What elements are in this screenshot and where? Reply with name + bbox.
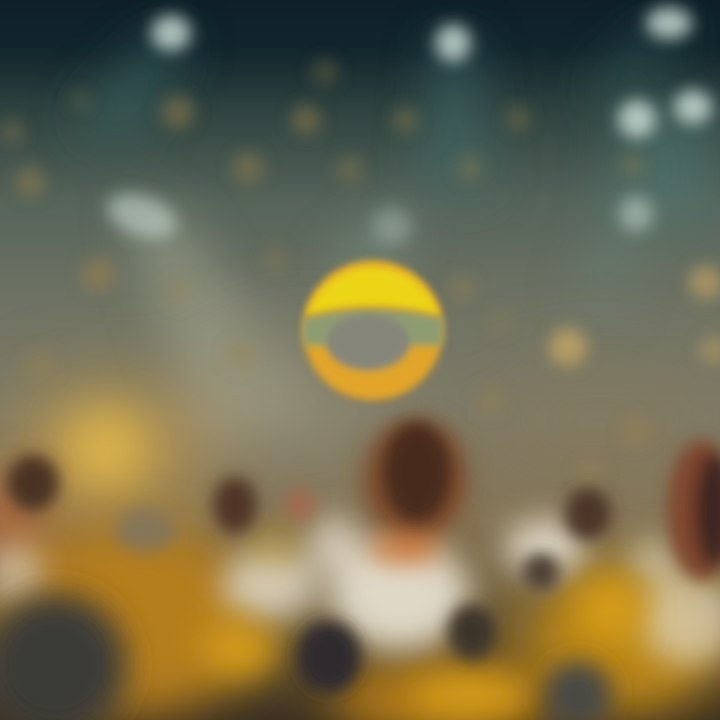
head: small orange figure bbox=[285, 489, 315, 521]
head: centre figure bbox=[363, 420, 467, 564]
brighter bokeh lights bbox=[549, 265, 720, 366]
bokeh lights bbox=[0, 58, 650, 488]
head: far right figure bbox=[668, 440, 720, 580]
head: foreground dark bbox=[297, 621, 361, 693]
ball centre bbox=[326, 314, 410, 370]
white shirts bbox=[0, 517, 720, 665]
crowd warm base bbox=[0, 470, 720, 720]
ball top band bbox=[306, 266, 440, 316]
head: mid left figure bbox=[213, 477, 257, 533]
head: left figure bbox=[7, 455, 59, 511]
head: foreground gray left bbox=[0, 593, 127, 720]
bright flare lower left bbox=[65, 410, 145, 490]
bright yellow accents bbox=[202, 527, 642, 717]
head: small figure in white bbox=[522, 553, 560, 591]
head: gray upper left bbox=[115, 508, 175, 552]
warm haze bbox=[10, 330, 720, 515]
spotlights bbox=[101, 7, 712, 247]
head: foreground brown bbox=[448, 604, 496, 660]
people heads bbox=[0, 420, 720, 720]
head: right figure bbox=[565, 488, 611, 540]
yellow ball bbox=[303, 260, 443, 400]
light beams bbox=[70, 20, 720, 440]
ball body bbox=[303, 260, 443, 400]
ball mid band bbox=[303, 309, 443, 345]
head: foreground gray right bbox=[544, 661, 612, 720]
